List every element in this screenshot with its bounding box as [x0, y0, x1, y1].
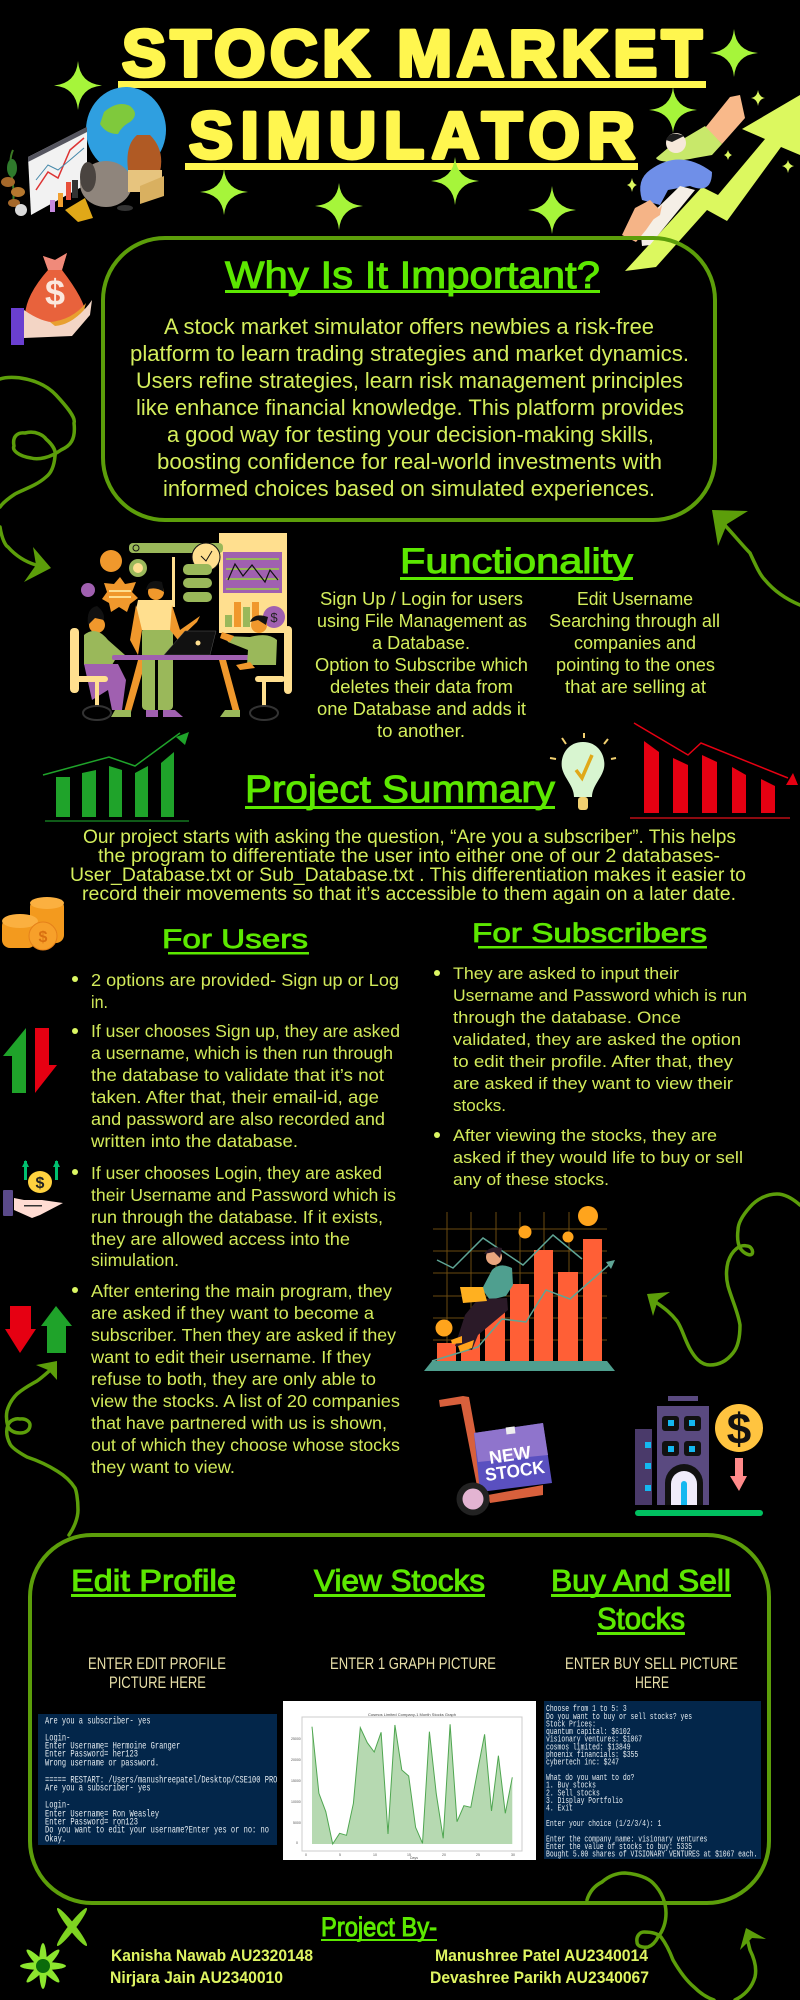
illustration: person riding rising arrow [622, 90, 800, 271]
screenshot: buy and sell terminal: Bought 5.00 shares of VISIONARY VENTURES at $1067 each. [546, 1849, 757, 1860]
text block: why it is important: A stock market simulator offers newbies a risk-free [164, 314, 654, 339]
screenshot: edit profile terminal: ===== RESTART: /Users/manushreepatel/Desktop/CSE100 PROJECT [45, 1774, 294, 1786]
text block: buy sell placeholder: HERE [635, 1674, 669, 1692]
sparkles [54, 29, 758, 234]
text block: for subscribers bullets: through the database. Once [453, 1008, 681, 1027]
icon: light bulb with check [550, 733, 616, 810]
text block: for users bullets: are asked if they want to become a [91, 1303, 374, 1323]
text block: authors: Devashree Parikh AU2340067 [430, 1968, 649, 1987]
screenshot: buy and sell terminal: Enter the value of stocks to buy: 5335 [546, 1842, 692, 1853]
screenshot: buy and sell terminal: Enter the company name: visionary ventures [546, 1834, 708, 1845]
text block: for subscribers bullets: After viewing the stocks, they are [453, 1126, 717, 1145]
text block: for subscribers bullets: asked if they would life to buy or sell [453, 1148, 743, 1167]
text block: functionality left: to another. [377, 721, 465, 741]
chart: one month stocks graph: 5 [339, 1853, 341, 1857]
text block: functionality right: companies and [574, 633, 696, 653]
heading: why is it important: Why Is It Important? [225, 255, 600, 297]
chart: one month stocks graph: 15 [407, 1853, 411, 1857]
text block: for users bullets: If user chooses Login, they are asked [91, 1163, 382, 1183]
screenshot: edit profile terminal: Enter Password= ron123 [45, 1816, 138, 1828]
text block: functionality left: deletes their data from [330, 677, 513, 697]
screenshot: buy and sell terminal: What do you want to do? [546, 1773, 635, 1784]
text block: for users bullets: If user chooses Sign up, they are asked [91, 1021, 400, 1041]
heading: project by: Project By- [321, 1912, 437, 1942]
illustration: globe and market commodities [1, 87, 166, 222]
icon: red down and green up arrows [5, 1306, 72, 1353]
text block: for subscribers bullets: validated, they are asked the option [453, 1030, 741, 1049]
chart: one month stocks graph: 25 [476, 1853, 480, 1857]
text block: for users bullets: a username, which is then run through [91, 1043, 393, 1063]
title: STOCK MARKET [122, 16, 702, 90]
heading: edit profile: Edit Profile [71, 1563, 236, 1598]
screenshot: buy and sell terminal: 3. Display Portfolio [546, 1796, 623, 1807]
panel: bottom features [30, 1535, 769, 1903]
text block: project summary: record their movements so that it’s accessible to them again on a later date. [82, 884, 736, 905]
text block: why it is important: a good way for testing your decision-making skills, [167, 422, 654, 447]
title: SIMULATOR [189, 98, 635, 172]
screenshot: buy and sell terminal: Enter your choice (1/2/3/4): 1 [546, 1819, 661, 1830]
screenshot: buy and sell terminal: visionary ventures: $1067 [546, 1734, 642, 1745]
screenshot: buy and sell terminal: phoenix financials: $355 [546, 1750, 638, 1761]
text block: for users bullets: 2 options are provided- Sign up or Log [91, 970, 399, 990]
text block: for users bullets: siimulation. [91, 1250, 179, 1270]
screenshot: buy and sell terminal: cybertech inc: $247 [546, 1757, 619, 1768]
icon: up and down arrows [3, 1028, 57, 1093]
text block: functionality right: Searching through all [549, 611, 720, 631]
text block: edit profile placeholder [88, 1655, 226, 1692]
icon: coin stacks [2, 897, 64, 950]
screenshot: edit profile terminal: Wrong username or password. [45, 1757, 159, 1769]
icon: hand with coin: $ [36, 1175, 45, 1192]
text block: why it is important: platform to learn trading strategies and market dynamics. [130, 341, 689, 366]
text block: project summary: the program to differentiate the user into either one of our 2 databases- [98, 846, 720, 867]
text block: for users bullets: taken. After that, their email-id, age [91, 1087, 379, 1107]
icon: money bag in hand [11, 253, 92, 345]
chart: one month stocks graph: 30 [511, 1853, 515, 1857]
screenshot: edit profile terminal: Login- [45, 1799, 70, 1811]
arrow: right squiggle pointing to chart [647, 1194, 800, 1365]
screenshot: edit profile terminal: Okay. [45, 1833, 66, 1845]
text block: functionality right [549, 589, 720, 697]
heading: project summary: Project Summary [245, 769, 555, 811]
screenshot: buy and sell terminal: 2. Sell stocks [546, 1788, 600, 1799]
chart: one month stocks graph: Days [410, 1856, 418, 1860]
text block: for users bullets: their Username and Password which is [91, 1185, 396, 1205]
screenshot: edit profile terminal: Enter Username= Hermoine Granger [45, 1740, 180, 1752]
panel: why it is important [103, 238, 715, 520]
icon: green cross leaf [54, 1906, 90, 1948]
text block: for subscribers bullets [434, 964, 747, 1189]
chart: one month stocks graph: 10 [373, 1853, 377, 1857]
screenshot: edit profile terminal: Enter Username= Ron Weasley [45, 1808, 159, 1820]
text block: functionality right: pointing to the ones [556, 655, 715, 675]
text block: functionality right: that are selling at [565, 677, 706, 697]
text block: graph placeholder: ENTER 1 GRAPH PICTURE [330, 1655, 496, 1673]
chart: one month stocks graph: 0 [305, 1853, 307, 1857]
text block: for users bullets: and password are also recorded and [91, 1109, 385, 1129]
chart: one month stocks graph [283, 1701, 536, 1860]
chart: one month stocks graph: 20 [442, 1853, 446, 1857]
screenshot: buy and sell terminal [544, 1701, 761, 1860]
chart: one month stocks graph: 15000 [291, 1779, 301, 1783]
screenshot: edit profile terminal: Are you a subscriber- yes [45, 1782, 151, 1794]
text block: for subscribers bullets: stocks. [453, 1096, 506, 1115]
text block: authors: Nirjara Jain AU2340010 [110, 1968, 283, 1987]
text block: for users bullets: written into the database. [90, 1131, 298, 1151]
screenshot: buy and sell terminal: 1. Buy stocks [546, 1780, 596, 1791]
screenshot: buy and sell terminal: 4. Exit [546, 1803, 573, 1814]
screenshot: edit profile terminal [38, 1714, 294, 1845]
text block: why it is important: informed choices based on simulated experiences. [163, 476, 655, 501]
illustration: team at table: $ [270, 610, 278, 625]
text block: for users bullets: they are allowed access into the [91, 1229, 350, 1249]
text block: buy sell placeholder: ENTER BUY SELL PICTURE [565, 1655, 738, 1673]
icon: money bag in hand: $ [45, 272, 65, 313]
text block: functionality left: using File Management as [317, 611, 527, 631]
text block: functionality right: Edit Username [577, 589, 693, 609]
text block: authors [110, 1946, 649, 1987]
text block: for users bullets: After entering the main program, they [91, 1281, 392, 1301]
text block: functionality left: Option to Subscribe which [315, 655, 528, 675]
arrow: bottom right squiggle [587, 1873, 766, 2000]
text block: functionality left: one Database and adds it [317, 699, 526, 719]
heading: for subscribers: For Subscribers [472, 918, 707, 948]
chart: one month stocks graph: 5000 [293, 1821, 301, 1825]
text block: for users bullets [72, 970, 400, 1477]
text block: for users bullets: that have partnered with us is shown, [91, 1413, 387, 1433]
text block: why it is important: Users refine strategies, learn risk management principles [136, 368, 683, 393]
text block: buy sell placeholder [565, 1655, 738, 1692]
illustration: new stock cart: STOCK [484, 1457, 546, 1485]
text block: project summary: User_Database.txt or Sub_Database.txt . This differentiation makes it easier to [70, 865, 746, 886]
text block: authors: Manushree Patel AU2340014 [435, 1946, 648, 1965]
heading: view stocks: View Stocks [314, 1563, 485, 1598]
text block: for users bullets: the database to validate that it’s not [91, 1065, 384, 1085]
text block: project summary [70, 827, 746, 905]
arrow: lower left squiggle [6, 1361, 78, 1535]
heading: buy and sell stocks: Stocks [597, 1601, 685, 1636]
text block: for users bullets: view the stocks. A list of 20 companies [91, 1391, 400, 1411]
text block: for subscribers bullets: to edit their profile. After that, they [453, 1052, 734, 1071]
screenshot: edit profile terminal: Login- [45, 1732, 70, 1744]
illustration: building with dollar: $ [727, 1405, 751, 1454]
heading: functionality: Functionality [400, 542, 634, 581]
text block: why it is important [130, 314, 689, 501]
screenshot: buy and sell terminal: cosmos limited: $13849 [546, 1742, 631, 1753]
text block: for users bullets: want to edit their username. If they [90, 1347, 371, 1367]
text block: functionality left: Sign Up / Login for users [320, 589, 523, 609]
chart: one month stocks graph: 10000 [291, 1800, 301, 1804]
text block: for users bullets: subscriber. Then they are asked if they [91, 1325, 396, 1345]
chart: one month stocks graph: 25000 [291, 1737, 301, 1741]
screenshot: edit profile terminal: Are you a subscriber- yes [45, 1715, 151, 1727]
screenshot: buy and sell terminal: Choose from 1 to 5: 3 [546, 1704, 627, 1715]
screenshot: edit profile terminal: Do you want to edit your username?Enter yes or no: no [45, 1824, 269, 1836]
icon: coin stacks: $ [39, 929, 48, 946]
heading: buy and sell stocks: Buy And Sell [551, 1563, 731, 1598]
illustration: team at table [70, 533, 292, 720]
text block: for users bullets: they want to view. [91, 1457, 235, 1477]
chart: one month stocks graph: 20000 [291, 1758, 301, 1762]
text block: for subscribers bullets: Username and Password which is run [453, 986, 747, 1005]
illustration: person with laptop on bar chart [424, 1206, 615, 1371]
heading: for users: For Users [162, 924, 308, 954]
text block: for users bullets: refuse to both, they are only able to [91, 1369, 376, 1389]
text block: for users bullets: run through the database. If it exists, [91, 1207, 383, 1227]
text block: functionality left: a Database. [372, 633, 470, 653]
illustration: building with dollar [635, 1396, 763, 1516]
screenshot: edit profile terminal: Enter Password= her123 [45, 1748, 138, 1760]
screenshot: buy and sell terminal: Do you want to buy or sell stocks? yes [546, 1712, 692, 1723]
text block: functionality left [315, 589, 528, 741]
text block: for subscribers bullets: They are asked to input their [453, 964, 679, 983]
text block: for users bullets: in. [91, 992, 108, 1012]
screenshot: buy and sell terminal: Stock Prices: [546, 1719, 596, 1730]
text block: project summary: Our project starts with asking the question, “Are you a subscriber”. This helps [83, 827, 736, 848]
text block: edit profile placeholder: PICTURE HERE [109, 1674, 206, 1692]
heading: buy and sell stocks [551, 1563, 731, 1636]
chart icon: red falling bars [630, 723, 798, 819]
text block: why it is important: boosting confidence for real-world investments with [157, 449, 662, 474]
chart: one month stocks graph: Cosmos Limited Company-1 Month Stocks Graph [368, 1712, 456, 1717]
illustration: new stock cart: NEW [488, 1442, 532, 1468]
arrow: right squiggle [712, 510, 800, 605]
icon: green flower [20, 1943, 66, 1989]
text block: edit profile placeholder: ENTER EDIT PROFILE [88, 1655, 226, 1673]
text block: for subscribers bullets: any of these stocks. [453, 1170, 609, 1189]
arrow: left squiggle [0, 377, 74, 582]
chart icon: green rising bars [43, 732, 189, 822]
text block: for users bullets: out of which they choose whose stocks [91, 1435, 400, 1455]
text block: authors: Kanisha Nawab AU2320148 [111, 1946, 313, 1965]
illustration: new stock cart [439, 1396, 552, 1516]
screenshot: buy and sell terminal: quantum capital: $6102 [546, 1727, 631, 1738]
text block: why it is important: like enhance financial knowledge. This platform provides [136, 395, 684, 420]
title [118, 16, 706, 172]
icon: hand with coin [3, 1160, 63, 1218]
text block: for subscribers bullets: are asked if they want to view their [453, 1074, 733, 1093]
chart: one month stocks graph: 0 [296, 1841, 298, 1845]
